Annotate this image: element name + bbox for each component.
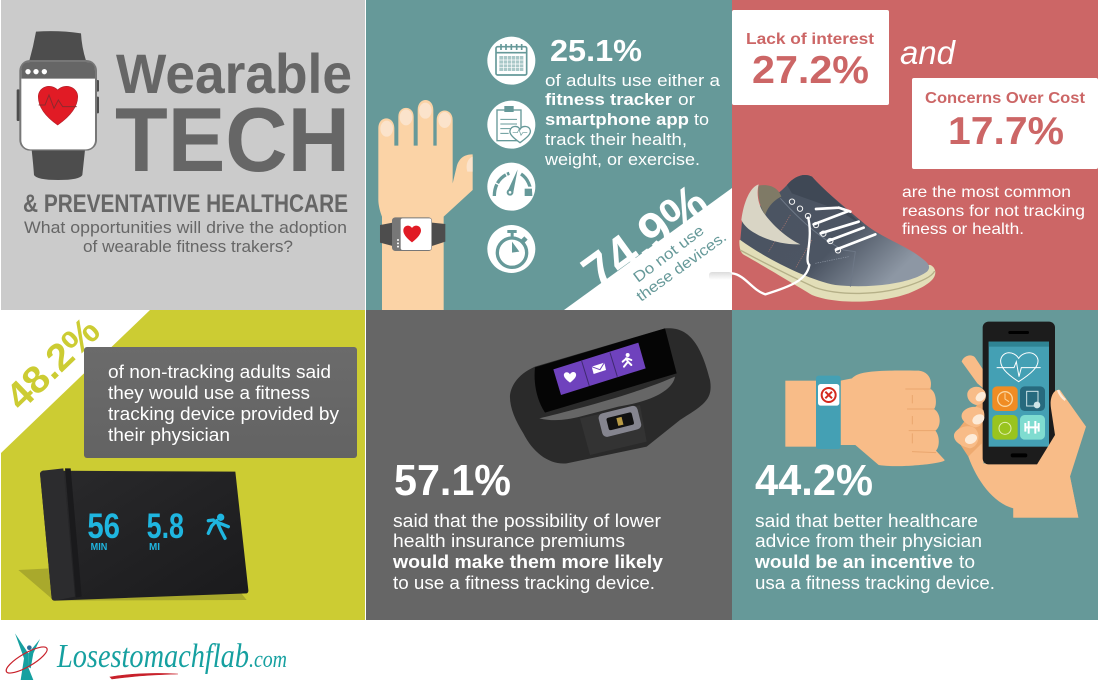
callout: concerns over cost xyxy=(912,78,1098,169)
icon: calendar xyxy=(487,37,535,85)
text: healthcare advice description: would be an incentive xyxy=(754,552,953,572)
text: insurance premiums description xyxy=(392,511,663,593)
shoe heel highlight on triangle xyxy=(709,272,732,280)
text: adult usage description: fitness tracker xyxy=(545,90,672,109)
illustration: hand holding smartphone xyxy=(954,322,1086,518)
illustration: black fitness display device: 5.8 xyxy=(147,507,184,546)
text: adult usage description: to xyxy=(694,110,709,129)
white corner triangle xyxy=(1,310,150,453)
text: adult usage description: weight, or exercise. xyxy=(544,150,700,169)
callout: lack of interest: Lack of interest xyxy=(746,31,875,48)
heading: TECH: TECH xyxy=(115,90,350,191)
text: insurance premiums description: would make them more likely xyxy=(392,552,663,572)
callout: concerns over cost: 17.7% xyxy=(948,110,1064,153)
subtitle: of wearable fitness trakers? xyxy=(83,237,293,256)
icon: clipboard with heart xyxy=(487,101,535,149)
panel: healthcare advice xyxy=(732,310,1098,620)
logo: Losestomachflab.com xyxy=(3,633,287,680)
illustration: black fitness display device: MIN xyxy=(91,542,107,553)
callout: lack of interest: 27.2% xyxy=(752,49,869,92)
logo swoosh xyxy=(110,673,178,679)
text: do not use these devices: Do not use xyxy=(630,222,707,286)
icon: speedometer gauge xyxy=(487,163,535,211)
illustration: black fitness display device: 56 xyxy=(87,507,120,546)
text: healthcare advice description: usa a fitness tracking device. xyxy=(755,573,995,593)
illustration: fist with tracker band xyxy=(785,371,945,466)
subtitle: What opportunities will drive the adoption xyxy=(24,218,347,237)
text: adult usage description: of adults use either a xyxy=(545,71,721,90)
stat: 25.1%: 25.1% xyxy=(550,33,642,68)
subtitle xyxy=(24,218,347,256)
text: insurance premiums description: said that the possibility of lower xyxy=(393,511,661,531)
stat: 74.9%: 74.9% xyxy=(572,173,719,303)
illustration: sneaker xyxy=(732,175,935,302)
callout: concerns over cost: Concerns Over Cost xyxy=(925,90,1086,107)
illustration: hand with smartwatch xyxy=(378,100,473,310)
panel: title xyxy=(1,0,365,310)
panel: reasons for not tracking xyxy=(732,0,1098,310)
text: most common reasons: reasons for not tracking xyxy=(902,203,1085,220)
callout: lack of interest xyxy=(732,10,889,105)
text: insurance premiums description: health insurance premiums xyxy=(393,531,625,551)
text: adult usage description: or xyxy=(678,90,695,109)
text: healthcare advice description: advice from their physician xyxy=(755,531,982,551)
text: do not use these devices: these devices. xyxy=(633,229,730,305)
callout: non-tracking adults xyxy=(84,347,357,458)
heading: Wearable: Wearable xyxy=(116,42,352,105)
text: most common reasons xyxy=(902,184,1085,238)
text: healthcare advice description: said that better healthcare xyxy=(755,511,978,531)
text: adult usage description: smartphone app xyxy=(545,110,689,129)
stat: 57.1%: 57.1% xyxy=(394,456,511,505)
text: healthcare advice description: to xyxy=(959,552,975,572)
callout: non-tracking adults: of non-tracking adults said xyxy=(108,362,331,382)
white corner triangle xyxy=(564,188,732,310)
callout: non-tracking adults: tracking device provided by xyxy=(108,404,339,424)
panel: lower insurance premiums xyxy=(366,310,732,620)
stat: 48.2%: 48.2% xyxy=(0,310,109,418)
logo wordmark suffix: .com xyxy=(249,647,287,673)
text: adult usage description xyxy=(544,71,721,169)
illustration: fitness band xyxy=(510,328,711,463)
text: insurance premiums description: to use a fitness tracking device. xyxy=(393,573,655,593)
text: and: and xyxy=(900,34,957,71)
text: most common reasons: are the most common xyxy=(902,184,1071,201)
icon: stopwatch xyxy=(487,225,535,273)
text: healthcare advice description xyxy=(754,511,995,593)
icon: logo figure xyxy=(3,633,50,680)
heading: preventative healthcare: & PREVENTATIVE HEALTHCARE xyxy=(23,190,348,218)
logo wordmark: Losestomachflab xyxy=(56,638,249,675)
text: most common reasons: finess or health. xyxy=(902,221,1024,238)
callout: non-tracking adults: their physician xyxy=(108,425,230,445)
panel: adult usage xyxy=(366,0,732,310)
icon: smartwatch with heart xyxy=(17,31,99,180)
callout: non-tracking adults: they would use a fitness xyxy=(108,383,310,403)
panel: physician provided device xyxy=(0,310,365,620)
stat: 44.2%: 44.2% xyxy=(755,456,873,505)
illustration: black fitness display device: MI xyxy=(149,542,160,553)
illustration: black fitness display device xyxy=(18,468,248,601)
text: adult usage description: track their health, xyxy=(545,130,687,149)
